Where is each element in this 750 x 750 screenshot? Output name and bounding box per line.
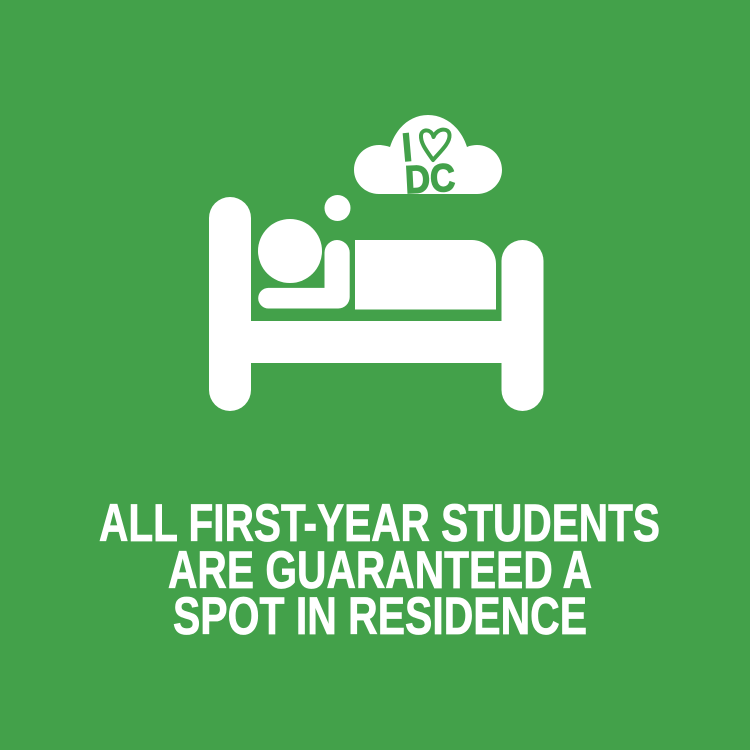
thought cloud with I love DC: [354, 115, 502, 202]
headline line 3: SPOT IN RESIDENCE: [173, 587, 587, 646]
thought bubble small circle: [324, 195, 350, 221]
headline line 2: ARE GUARANTEED A: [168, 541, 592, 600]
text: DC: DC: [404, 157, 456, 202]
bed frame: [209, 197, 544, 411]
icon: heart: [421, 130, 450, 160]
blanket: [355, 240, 496, 310]
headline text: [99, 494, 660, 646]
sleeper head: [258, 219, 322, 283]
sleeper arm: [258, 240, 350, 308]
text: I: I: [400, 126, 414, 170]
icon: person sleeping in bed: [209, 115, 544, 411]
